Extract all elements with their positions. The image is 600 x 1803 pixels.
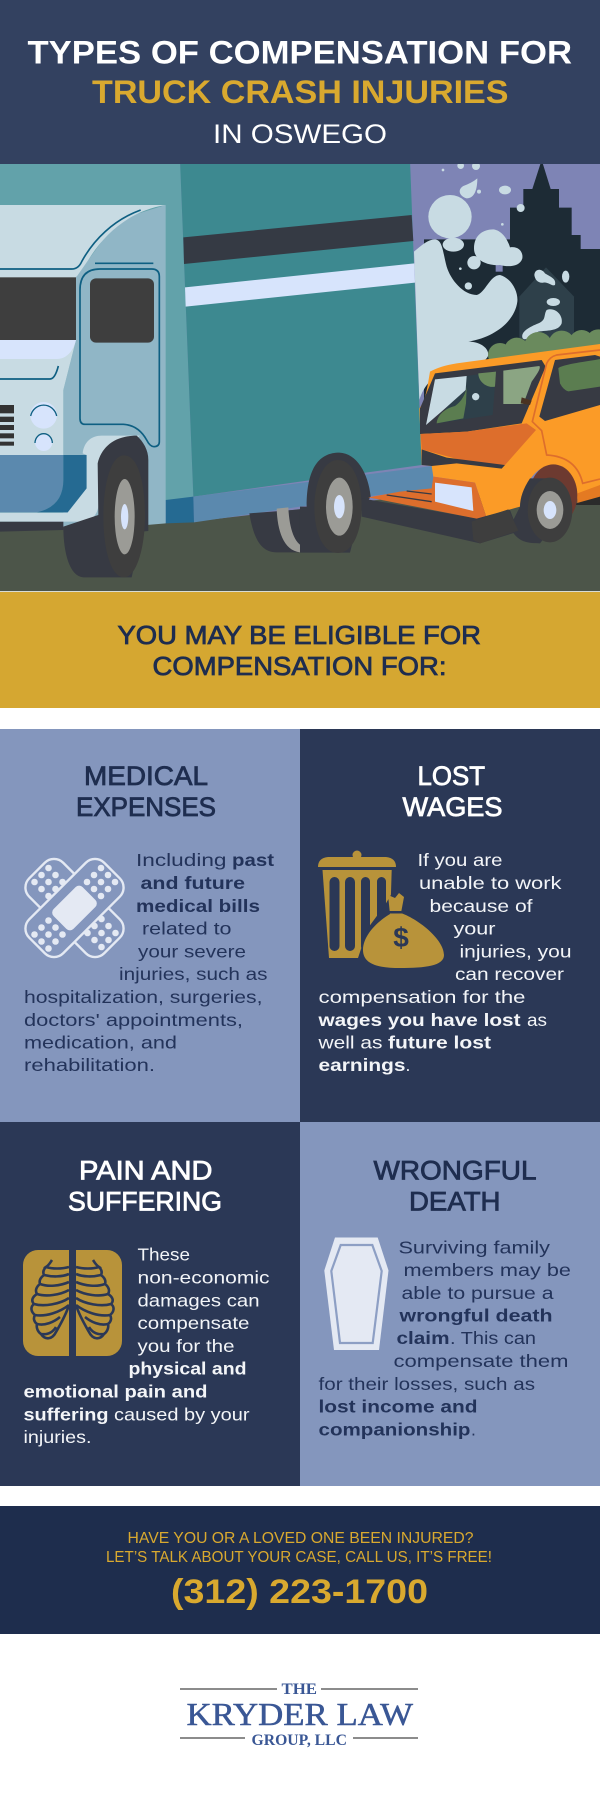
- cab blue block: [166, 497, 194, 523]
- panel: wrongful death: [300, 1122, 600, 1486]
- phone number: (312) 223-1700: [171, 1573, 428, 1611]
- header panel: [0, 0, 600, 164]
- pain and suffering text: damages can: [138, 1290, 260, 1310]
- wrongful death text: [318, 1238, 571, 1440]
- pain and suffering text: injuries.: [24, 1427, 92, 1447]
- heading: medical expenses: [76, 761, 216, 822]
- pain and suffering text: caused by your: [114, 1404, 250, 1424]
- heading: pain and suffering: PAIN AND: [79, 1156, 212, 1186]
- medical expenses text: related to: [142, 918, 232, 938]
- icon: rib cage: [23, 1250, 122, 1356]
- medical expenses text: and future: [140, 873, 245, 893]
- rear dual wheel: [249, 507, 300, 552]
- pain and suffering text: you for the: [138, 1336, 234, 1356]
- heading: lost wages: WAGES: [402, 792, 502, 822]
- bumper: [0, 436, 140, 532]
- lost wages text: wages you have lost: [317, 1010, 521, 1030]
- sky: [48, 164, 600, 528]
- grille: [0, 405, 14, 446]
- pain and suffering text: non-economic: [138, 1268, 270, 1288]
- lost wages text: unable to work: [419, 873, 562, 893]
- headlights: [30, 402, 57, 451]
- lost wages text: because of: [430, 896, 533, 916]
- pain and suffering text: compensate: [138, 1313, 250, 1333]
- wrongful death text: .: [471, 1420, 476, 1440]
- logo: The Kryder Law Group, LLC: KRYDER LAW: [186, 1696, 414, 1732]
- heading: wrongful death: DEATH: [409, 1186, 500, 1216]
- car sill: [577, 485, 600, 504]
- bushes: [488, 329, 600, 359]
- truck cab rear panel: [0, 160, 193, 530]
- icon: trash can with money bag: $: [393, 922, 409, 953]
- car side window: [539, 355, 600, 421]
- medical expenses text: [24, 850, 274, 1075]
- lost wages text: your: [454, 918, 496, 938]
- medical expenses text: past: [232, 850, 274, 870]
- heading: pain and suffering: [68, 1156, 222, 1216]
- heading: medical expenses: EXPENSES: [76, 792, 216, 822]
- ground: [0, 493, 600, 593]
- lost wages text: If you are: [418, 850, 502, 870]
- medical expenses text: doctors' appointments,: [24, 1010, 243, 1030]
- lost wages text: can recover: [455, 964, 564, 984]
- heading: lost wages: LOST: [418, 761, 485, 791]
- windshield frame: [420, 360, 546, 434]
- icon: coffin: [324, 1238, 388, 1350]
- pain and suffering text: physical and: [128, 1358, 246, 1378]
- box dark stripe: [183, 215, 413, 264]
- car hood: [421, 423, 536, 465]
- license plate: [435, 483, 473, 511]
- box lower stripe: [193, 466, 433, 522]
- band heading line 1: YOU MAY BE ELIGIBLE FOR: [118, 620, 481, 650]
- lost wages text: well as: [317, 1032, 383, 1052]
- lost wages text: .: [406, 1055, 410, 1075]
- wrongful death text: lost income and: [318, 1396, 478, 1416]
- call to action band: [0, 1506, 600, 1634]
- pain and suffering text: suffering: [24, 1404, 108, 1424]
- cab side: [63, 205, 166, 527]
- car bed: [362, 498, 518, 543]
- logo: The Kryder Law Group, LLC: THE: [282, 1681, 317, 1698]
- icon: trash can with money bag: [318, 850, 444, 968]
- lost wages text: as: [527, 1010, 547, 1030]
- windshield: [0, 277, 76, 340]
- lost wages text: compensation for the: [318, 987, 526, 1007]
- heading: wrongful death: WRONGFUL: [374, 1156, 536, 1186]
- eligibility band: [0, 591, 600, 708]
- heading: lost wages: [402, 761, 502, 822]
- wrongful death text: for their losses, such as: [318, 1374, 535, 1394]
- medical expenses text: hospitalization, surgeries,: [24, 987, 262, 1007]
- wrongful death text: wrongful death: [398, 1306, 552, 1326]
- cab lines: [0, 210, 159, 447]
- wrongful death text: members may be: [404, 1260, 571, 1280]
- wrongful death text: claim: [396, 1328, 450, 1348]
- panel: pain and suffering: [0, 1122, 300, 1486]
- cab white stripe: [0, 340, 76, 359]
- cab front: [0, 205, 166, 455]
- heading: medical expenses: MEDICAL: [84, 761, 208, 791]
- title line 1: TYPES OF COMPENSATION FOR: [28, 34, 572, 70]
- truck box: [180, 160, 422, 497]
- door window: [90, 278, 154, 343]
- wrongful death text: companionship: [318, 1420, 470, 1440]
- city skyline: [424, 160, 600, 400]
- wrongful death text: compensate them: [394, 1351, 568, 1371]
- medical expenses text: rehabilitation.: [24, 1055, 155, 1075]
- car front bumper: [496, 509, 508, 514]
- title line 2: TRUCK CRASH INJURIES: [92, 74, 509, 110]
- pain and suffering text: These: [138, 1244, 190, 1264]
- front wheel: [63, 436, 148, 577]
- lost wages text: earnings: [318, 1055, 406, 1075]
- box white stripe: [185, 263, 415, 307]
- cta line 1: HAVE YOU OR A LOVED ONE BEEN INJURED?: [128, 1530, 474, 1547]
- smoke cloud: [414, 162, 569, 400]
- wrongful death text: Surviving family: [398, 1238, 550, 1258]
- cta line 2: LET’S TALK ABOUT YOUR CASE, CALL US, IT’S FREE!: [106, 1549, 492, 1566]
- medical expenses text: medication, and: [24, 1032, 177, 1052]
- logo: The Kryder Law Group, LLC: [180, 1681, 418, 1749]
- door line: [532, 350, 600, 483]
- pain and suffering text: [24, 1244, 270, 1447]
- band heading line 2: COMPENSATION FOR:: [152, 651, 446, 681]
- rear truck wheel: [300, 453, 371, 553]
- car wheel: [510, 464, 577, 543]
- wrongful death text: able to pursue a: [402, 1283, 554, 1303]
- panel: lost wages: [300, 729, 600, 1122]
- illustration: truck crash: [0, 160, 600, 593]
- orange car and rear truck wheel: [300, 344, 600, 553]
- lost wages text: [317, 850, 572, 1075]
- logo: The Kryder Law Group, LLC: GROUP, LLC: [252, 1732, 347, 1749]
- car lower panel: [368, 477, 486, 519]
- heading: pain and suffering: SUFFERING: [68, 1186, 222, 1216]
- lost wages text: injuries, you: [460, 942, 572, 962]
- lost wages text: future lost: [388, 1032, 491, 1052]
- car body: [419, 344, 600, 516]
- medical expenses text: injuries, such as: [119, 964, 268, 984]
- heading: wrongful death: [374, 1156, 536, 1216]
- medical expenses text: your severe: [138, 942, 246, 962]
- pain and suffering text: emotional pain and: [24, 1382, 208, 1402]
- medical expenses text: Including: [136, 850, 226, 870]
- icon: crossed bandages: [20, 854, 129, 962]
- medical expenses text: medical bills: [136, 896, 260, 916]
- windshield panes: [426, 366, 540, 425]
- wrongful death text: . This can: [450, 1328, 536, 1348]
- title line 3: IN OSWEGO: [213, 119, 387, 149]
- panel: medical expenses: [0, 729, 300, 1122]
